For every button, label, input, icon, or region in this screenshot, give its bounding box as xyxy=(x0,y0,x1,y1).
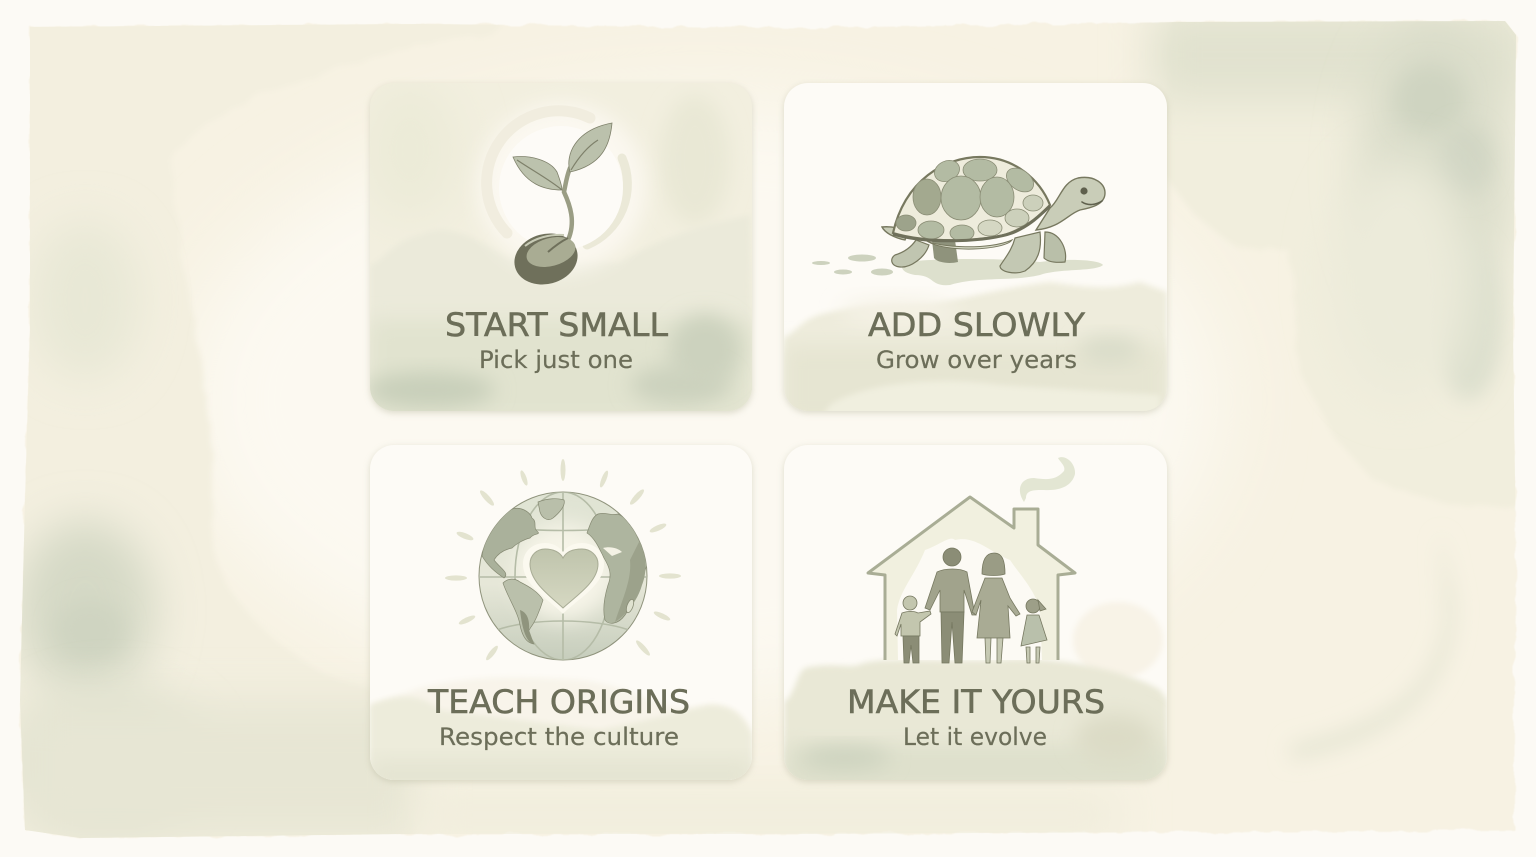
panel: add slowly xyxy=(784,83,1167,425)
house outline and wash xyxy=(868,497,1075,660)
north america and greenland xyxy=(482,508,538,578)
heading: make it yours: MAKE IT YOURS xyxy=(847,683,1105,721)
south america xyxy=(503,579,543,644)
subheading: respect the culture: Respect the culture xyxy=(439,723,679,751)
left washes xyxy=(0,0,500,857)
heading: add slowly: ADD SLOWLY xyxy=(868,306,1085,344)
panel: start small xyxy=(360,80,752,420)
heading: start small: START SMALL xyxy=(445,306,668,344)
subheading: grow over years: Grow over years xyxy=(876,346,1077,374)
rays xyxy=(445,459,681,662)
family xyxy=(895,548,1047,663)
panel: make it yours xyxy=(784,445,1167,790)
panel: teach origins xyxy=(370,445,752,790)
right green wash with hard inner edge xyxy=(1332,22,1516,506)
icon: house with family xyxy=(868,457,1075,663)
icon: turtle xyxy=(812,156,1105,285)
icon: sprouting seed xyxy=(487,111,627,291)
icon: globe with heart xyxy=(445,459,681,662)
subheading: let it evolve: Let it evolve xyxy=(903,723,1047,751)
eurasia and africa xyxy=(587,513,647,623)
heading: teach origins: TEACH ORIGINS xyxy=(427,683,690,721)
subheading: pick just one: Pick just one xyxy=(479,346,633,374)
smoke xyxy=(1020,457,1075,502)
puddle and footprints xyxy=(812,254,1103,285)
